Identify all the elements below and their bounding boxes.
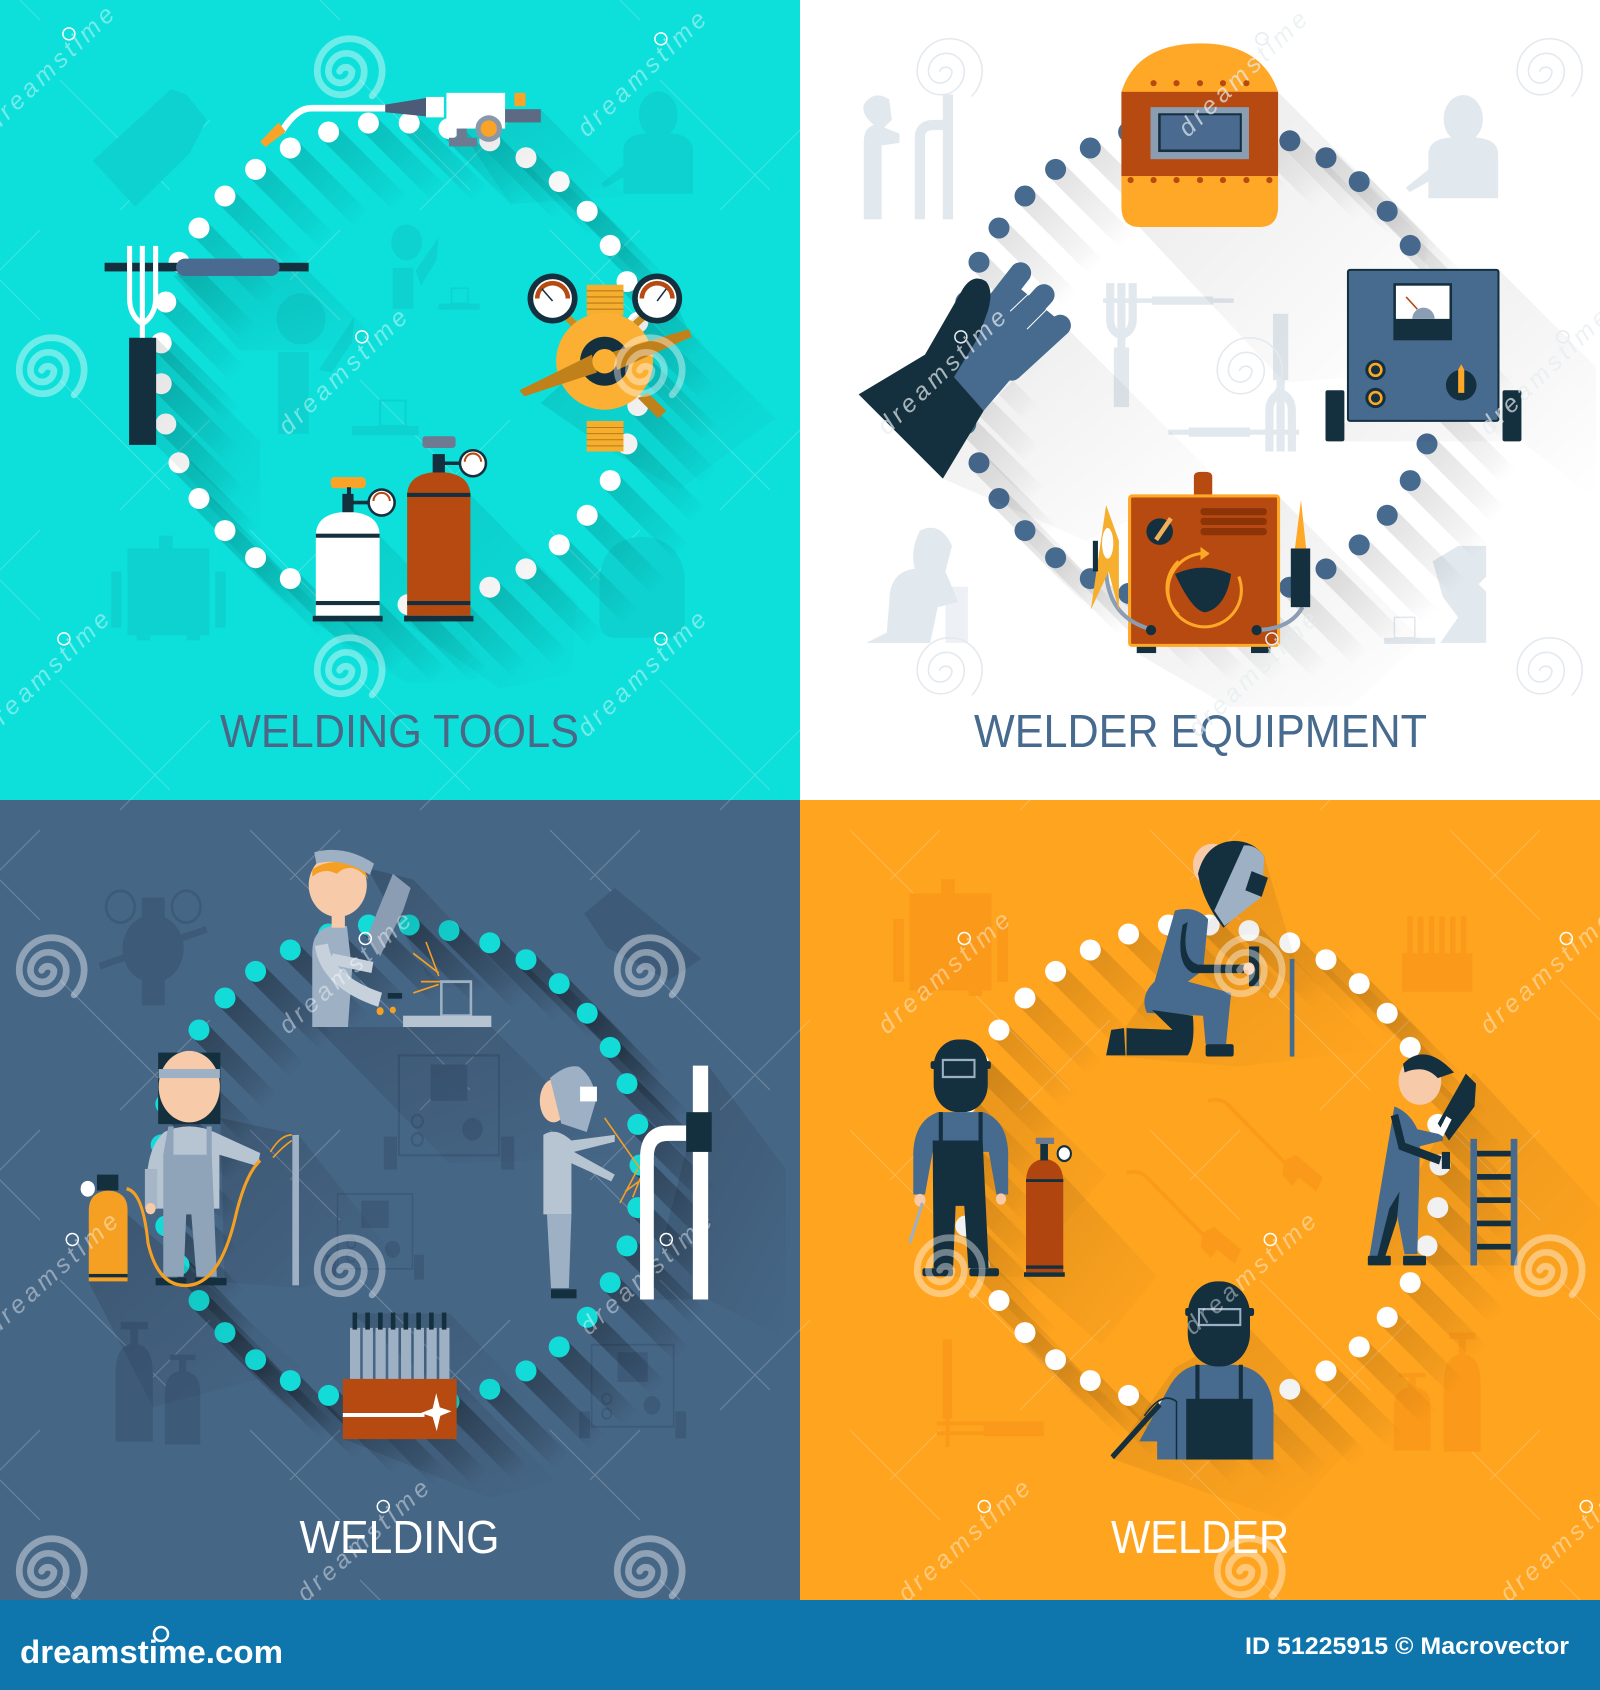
dot shadows: welding tools [161,123,712,677]
panel: welder equipment background [800,0,1600,800]
heading: welder: WELDER [1111,1511,1289,1563]
watermark: text over white panel: dreamstime [872,303,1012,440]
panel: welding tools background [0,0,800,800]
watermark: diagonal text: dreamstime [574,1207,718,1340]
figure: welder at bench [309,850,622,1163]
icon: welding glove [859,273,1218,541]
panel: welding artwork [99,888,702,1444]
panel: welding tools artwork [93,89,693,640]
watermark: text over white panel: dreamstime [1183,605,1323,742]
watermark: diagonal text: dreamstime [1178,1207,1322,1340]
icon: electrodes box with arc [343,1313,556,1498]
dot shadows: welding [161,925,712,1479]
panel: welding background [0,800,800,1600]
panel: welder artwork [893,879,1481,1452]
footer logo text: dreamstime.com [20,1634,283,1670]
watermark: diagonal text: dreamstime [273,906,417,1039]
icon: arc welding machine [1091,472,1422,707]
dot ring: welding [151,914,650,1417]
heading: welder equipment: WELDER EQUIPMENT [974,705,1427,757]
icon: brown gas cylinder [404,436,577,689]
icon: welding mask [1121,43,1428,383]
ghost icons: welder [893,879,1481,1452]
watermark: pale spirals on white panel [917,39,1582,695]
figure: masked welder at pipes [540,1066,786,1339]
panel: welder equipment artwork [863,94,1498,644]
icon: white gas cylinder [313,477,490,684]
watermark: diagonal text: dreamstime [892,1474,1036,1607]
icon: welding electrode holder [105,246,388,549]
figure: woman welding with cylinder [81,1051,398,1407]
footer bar [0,1600,1600,1690]
heading: welding: WELDING [300,1511,500,1563]
dot ring: welder equipment [951,112,1450,615]
figure: kneeling masked welder [1106,841,1377,1067]
ghost icons: welding [99,888,702,1444]
icon: gas regulator with gauges [519,273,776,490]
watermark: text over white panel: dreamstime [1173,5,1313,142]
watermark: diagonal text: dreamstime [572,605,712,742]
figure: welder with apron [1111,1281,1356,1521]
icon: cylinder beside standing welder [1024,1138,1157,1345]
ghost icons: welding tools [93,89,693,640]
image id and credit: ID 51225915 © Macrovector [1245,1633,1569,1660]
watermark: diagonal text: dreamstime [572,5,712,142]
icon: oxy-fuel torch [260,93,628,204]
footer logo spiral [154,1627,168,1641]
watermark: diagonal text: dreamstime [273,303,413,440]
watermark: text over white panel [869,3,1600,742]
heading: welding tools: WELDING TOOLS [220,705,579,757]
dot shadows: welder equipment [961,123,1512,677]
dot ring: welder [951,914,1450,1417]
figure: welder at ladder [1366,1054,1600,1311]
dot ring: welding tools [151,112,650,615]
icon: power unit with meter [1326,269,1596,500]
panel: welder background [800,800,1600,1600]
watermark: diagonal text: dreamstime [872,906,1016,1039]
watermark: diagonal text: dreamstime [291,1474,435,1607]
figure: standing welder with overalls [910,1040,1106,1277]
ghost icons: welder equipment [863,94,1498,644]
dot shadows: welder [961,925,1512,1479]
